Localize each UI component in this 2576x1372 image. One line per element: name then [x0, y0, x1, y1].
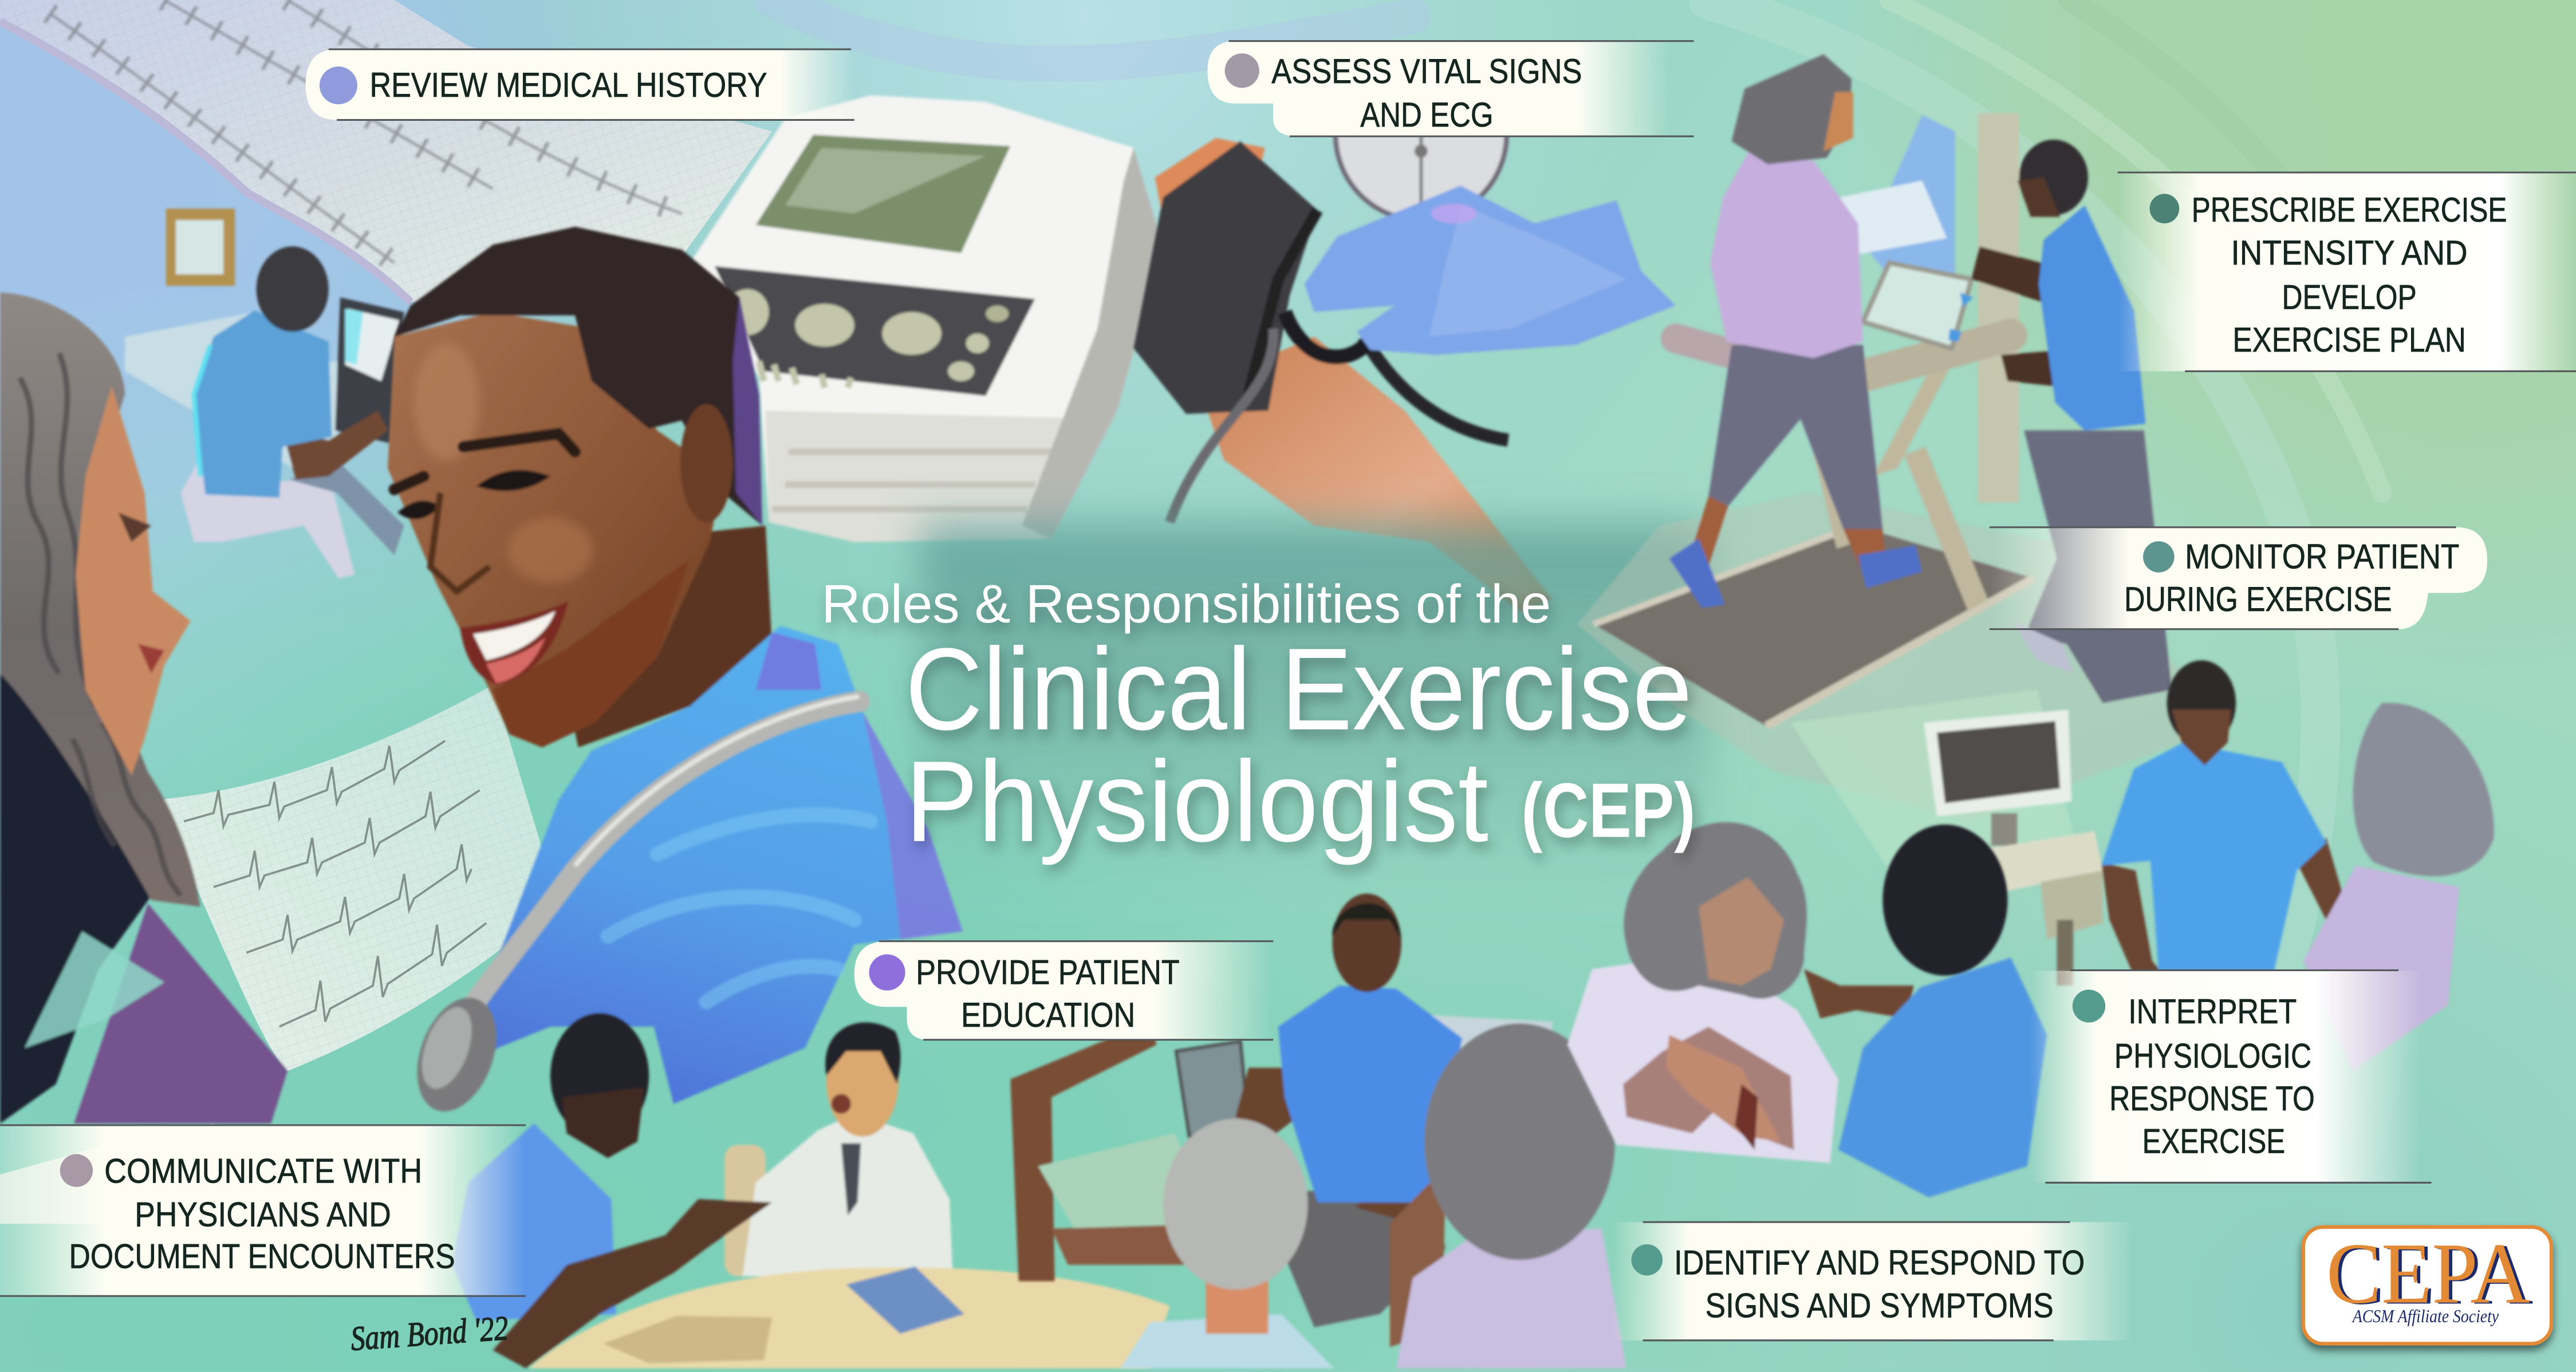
label: prescribe exercise: DEVELOP — [2282, 277, 2417, 316]
clinician head — [550, 1014, 649, 1158]
therapist head — [1882, 825, 2007, 976]
patient hair — [2353, 703, 2494, 876]
therapist head — [2167, 660, 2236, 766]
patient robe — [2303, 866, 2459, 1071]
label: interpret physiologic response — [2031, 970, 2432, 1182]
treadmill deck — [1594, 526, 2034, 726]
nose — [431, 493, 490, 592]
chair back — [724, 1145, 766, 1276]
label: prescribe exercise: PRESCRIBE EXERCISE — [2192, 190, 2507, 229]
jaw shading — [493, 558, 690, 747]
window — [1865, 115, 1955, 295]
patient face — [1699, 877, 1784, 985]
shirt brush strokes — [608, 815, 871, 1002]
left foreground woman — [0, 293, 287, 1123]
trousers — [289, 460, 404, 555]
clinician arm and hand — [493, 1199, 772, 1369]
clinician trousers — [1282, 1191, 1445, 1327]
physician tie — [841, 1144, 861, 1216]
CEPA logo: ACSM Affiliate Society — [2352, 1306, 2499, 1326]
chair seat — [1038, 1133, 1216, 1232]
label: assess vital signs: AND ECG — [1360, 95, 1494, 134]
title — [821, 574, 1695, 866]
label: communicate with physicians: COMMUNICATE WITH — [104, 1151, 422, 1190]
label: assess vital signs: ASSESS VITAL SIGNS — [1271, 52, 1582, 90]
cheek highlight — [507, 518, 593, 583]
handrail — [1814, 335, 2011, 389]
ECG machine — [690, 95, 1163, 542]
treadmill frame — [1807, 353, 1988, 611]
CEPA logo: CEPA — [2330, 1226, 2533, 1322]
hair — [394, 227, 762, 526]
label: prescribe exercise: INTENSITY AND — [2231, 233, 2468, 272]
control panel with knobs — [715, 266, 1035, 396]
dot — [1632, 1244, 1663, 1275]
dot — [869, 955, 905, 991]
therapist arms — [2101, 838, 2353, 972]
label: monitor patient: MONITOR PATIENT — [2185, 537, 2459, 576]
stethoscope clip — [1285, 312, 1372, 357]
patient robe — [1567, 953, 1838, 1163]
chair back — [1429, 1015, 1553, 1182]
chair frame — [1010, 1022, 1157, 1281]
desk — [125, 312, 337, 493]
label: interpret physiologic response: RESPONSE TO — [2109, 1079, 2315, 1118]
treadmill scene — [1577, 54, 2234, 821]
therapist shirt — [1838, 957, 2047, 1197]
purple garment — [74, 904, 287, 1123]
label: identify and respond — [1612, 1222, 2134, 1341]
label: review medical history — [306, 49, 854, 120]
tan folder — [603, 1316, 772, 1363]
blue glove — [1305, 186, 1676, 355]
label: monitor patient — [1990, 527, 2487, 629]
therapist arms — [1971, 246, 2129, 394]
forearm — [1199, 337, 1553, 611]
patient calves — [1689, 496, 1886, 567]
label: monitor patient: DURING EXERCISE — [2124, 579, 2392, 618]
label: communicate with physicians — [0, 1125, 526, 1296]
grey tube — [1169, 329, 1274, 522]
label: communicate with physicians: PHYSICIANS AND — [135, 1194, 391, 1233]
label: review medical history: REVIEW MEDICAL HISTORY — [369, 65, 767, 104]
label: prescribe exercise — [2118, 172, 2576, 371]
blue shirt — [485, 626, 963, 1104]
chest pain scene — [1567, 822, 2047, 1197]
label: prescribe exercise: EXERCISE PLAN — [2232, 320, 2466, 359]
clinician head — [1332, 894, 1401, 992]
dot — [2150, 194, 2179, 223]
black tube — [1364, 337, 1508, 440]
tablet — [1176, 1042, 1248, 1137]
label: provide patient education — [854, 941, 1273, 1040]
eyebrows — [394, 433, 575, 490]
dot — [1225, 53, 1259, 88]
teal highlights — [25, 931, 164, 1048]
therapist shirt — [2039, 206, 2145, 431]
ear — [680, 404, 732, 522]
monitor — [1924, 709, 2071, 846]
label: identify and respond: IDENTIFY AND RESPOND TO — [1674, 1243, 2085, 1282]
patient shoes — [1669, 539, 1922, 608]
label: interpret physiologic response: INTERPRET — [2128, 992, 2297, 1031]
therapist trousers — [2024, 431, 2172, 703]
patient education scene — [1010, 894, 1626, 1369]
chair — [181, 463, 355, 578]
clinician arms — [1235, 1068, 1454, 1224]
communication scene: clinician and physician — [452, 1014, 1169, 1369]
computer screen — [335, 297, 404, 444]
gauge dial — [1336, 49, 1507, 220]
patient hair — [1624, 822, 1807, 999]
neck — [558, 526, 772, 747]
dot — [60, 1154, 93, 1187]
seated man back — [1120, 1118, 1334, 1369]
upper arm skin — [1155, 138, 1265, 279]
ECG screen — [756, 135, 1010, 253]
clinician shirt — [452, 1123, 616, 1320]
face — [76, 386, 191, 775]
patient lungs — [1623, 1027, 1794, 1150]
mouth — [460, 601, 569, 685]
monitoring equipment and therapist with patient — [1791, 660, 2494, 1071]
physician head — [825, 1022, 900, 1137]
ECG paper strip lower — [0, 685, 558, 1224]
therapist head — [2018, 140, 2088, 217]
wood chair leg — [1390, 1166, 1445, 1347]
dot — [320, 66, 357, 104]
main clinician portrait — [388, 227, 963, 1104]
physician coat — [743, 1114, 953, 1276]
patient legs — [1708, 345, 1882, 529]
floor wash — [1577, 493, 2234, 821]
title backdrop band — [920, 509, 1708, 904]
dot — [2143, 541, 2175, 573]
label: identify and respond: SIGNS AND SYMPTOMS — [1705, 1286, 2054, 1325]
ECG paper strip upper — [0, 0, 772, 302]
title: Physiologist — [905, 737, 1488, 866]
clinician shirt — [1278, 985, 1462, 1203]
patient jacket — [1710, 153, 1863, 358]
stethoscope — [403, 696, 859, 1122]
patient hand and arm — [1666, 1035, 1781, 1142]
cuff — [1133, 141, 1318, 414]
curl strands — [19, 353, 181, 895]
therapist shirt — [2101, 743, 2326, 972]
arm — [282, 411, 388, 480]
label: assess vital signs — [1207, 41, 1694, 136]
office scene: person at computer — [125, 208, 404, 578]
title: (CEP) — [1521, 767, 1695, 854]
dark hair — [0, 641, 157, 1123]
dot — [2073, 989, 2105, 1023]
table — [529, 1267, 1169, 1369]
shirt — [194, 310, 332, 498]
label: interpret physiologic response: PHYSIOLOGIC — [2114, 1036, 2311, 1075]
pale floor patches — [1791, 690, 2086, 887]
label: provide patient education: EDUCATION — [961, 995, 1135, 1034]
seated woman back — [1396, 1023, 1626, 1369]
head — [257, 246, 329, 332]
equipment console — [1975, 831, 2103, 985]
title: Clinical Exercise — [905, 625, 1692, 755]
therapist arm — [1804, 969, 1914, 1019]
blue folder — [846, 1267, 964, 1334]
grey curls — [0, 293, 200, 906]
artist signature: Sam Bond '22 — [349, 1309, 510, 1358]
label: communicate with physicians: DOCUMENT ENCOUNTERS — [69, 1237, 455, 1276]
wall post — [1978, 113, 2019, 503]
face — [388, 312, 723, 747]
eyes — [397, 470, 550, 519]
console — [1863, 263, 1971, 348]
title: Roles & Responsibilities of the — [821, 574, 1551, 634]
CEPA logo: CEPA — [2326, 1225, 2530, 1322]
blood pressure arm, cuff and gauge — [1133, 49, 1676, 611]
label: interpret physiologic response: EXERCISE — [2142, 1122, 2285, 1161]
label: provide patient education: PROVIDE PATIENT — [916, 952, 1180, 991]
wall frame — [166, 208, 235, 286]
forehead highlight — [414, 344, 480, 462]
patient hair — [1732, 54, 1853, 164]
